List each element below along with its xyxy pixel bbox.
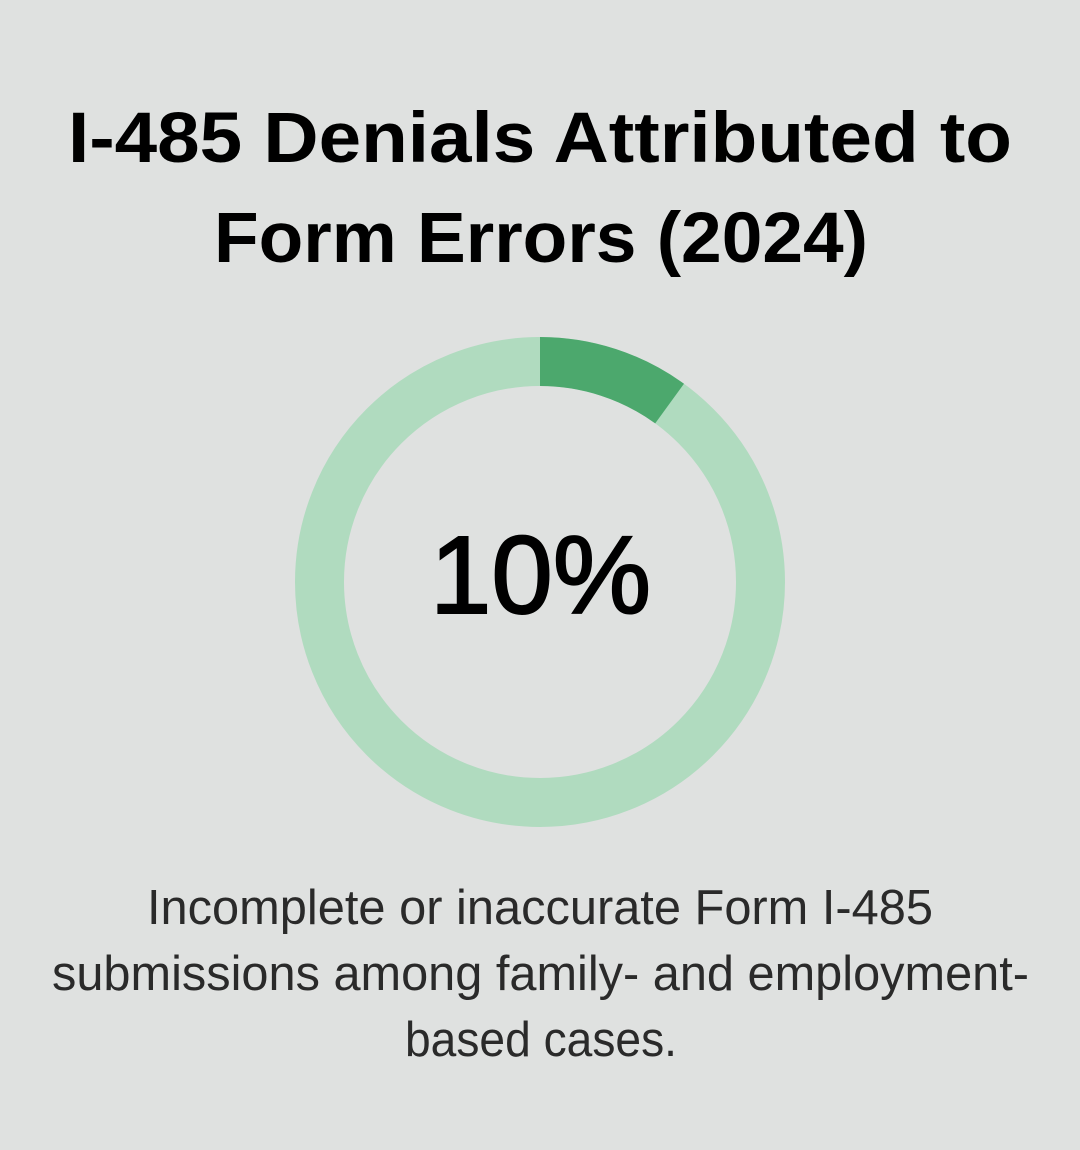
title <box>68 99 1012 278</box>
center value: 10% <box>430 514 651 637</box>
title: Form Errors (2024) <box>214 199 868 278</box>
caption: based cases. <box>405 1013 677 1067</box>
donut chart <box>320 337 760 802</box>
title: I-485 Denials Attributed to <box>68 99 1012 178</box>
caption: submissions among family- and employment- <box>52 947 1029 1001</box>
donut 10% segment <box>540 337 684 423</box>
caption: Incomplete or inaccurate Form I-485 <box>147 881 933 935</box>
caption <box>52 881 1029 1067</box>
donut remainder ring <box>320 362 760 802</box>
